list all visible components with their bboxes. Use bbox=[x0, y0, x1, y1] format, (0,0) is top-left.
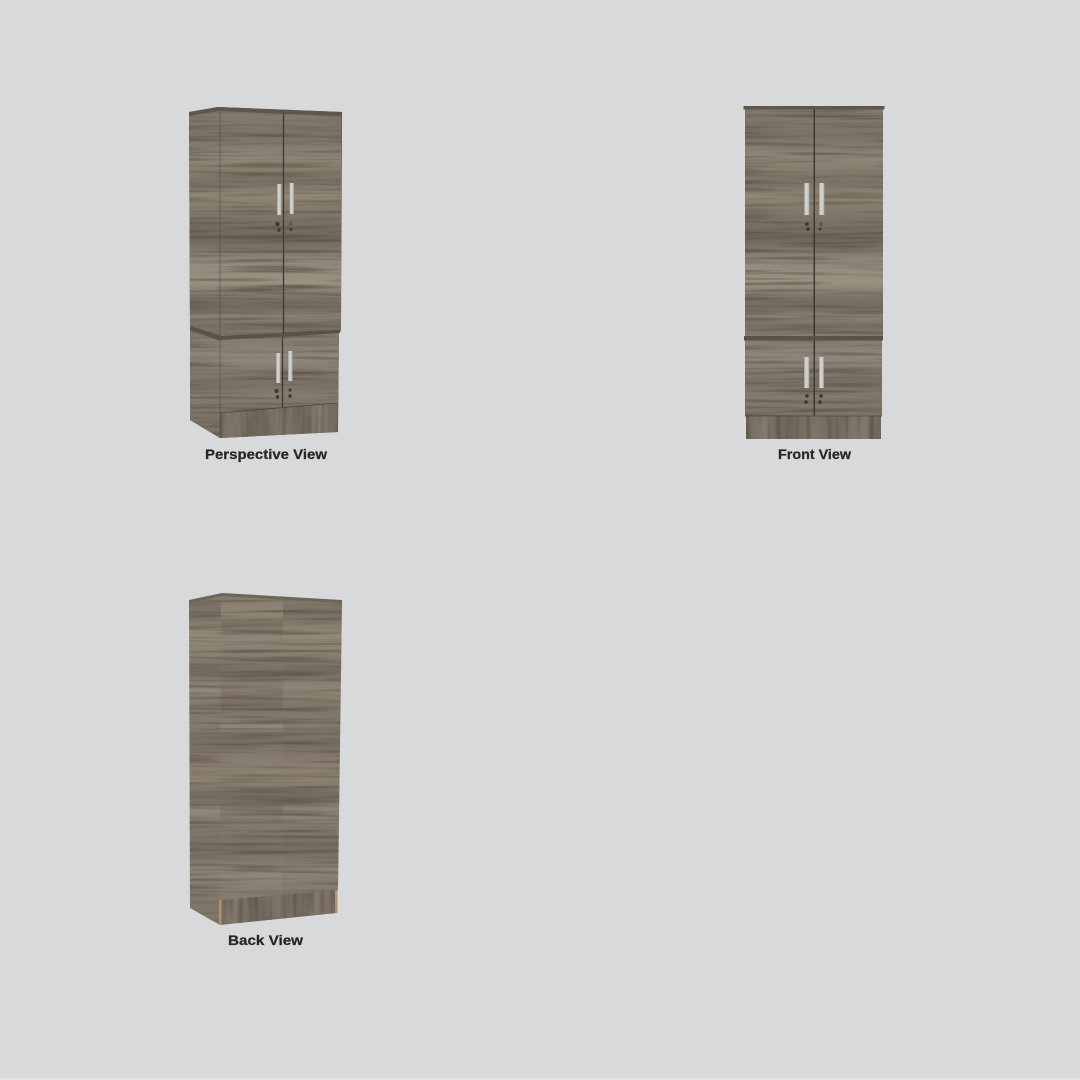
lower left door bbox=[220, 337, 282, 413]
upper left door bbox=[745, 109, 814, 336]
locks bbox=[804, 222, 823, 404]
cabinet silhouette bbox=[189, 107, 342, 438]
back panel right bbox=[283, 598, 342, 895]
top plank bbox=[744, 106, 884, 110]
back panel left bbox=[220, 596, 284, 900]
lower right door bbox=[283, 333, 339, 407]
bottom edge strip bbox=[0, 1078, 1080, 1080]
panel: front view bbox=[744, 106, 884, 462]
panel: perspective view bbox=[189, 107, 342, 462]
panel: back view bbox=[189, 593, 342, 948]
lower left door bbox=[745, 340, 814, 416]
door seams bbox=[745, 109, 882, 416]
label: perspective view: Perspective View bbox=[205, 446, 327, 462]
divider shelf bbox=[744, 336, 883, 340]
label: back view: Back View bbox=[228, 932, 303, 948]
plinth edges bbox=[219, 890, 338, 925]
plinth bbox=[746, 416, 881, 439]
plinth bbox=[220, 890, 337, 925]
top plank bbox=[189, 593, 342, 603]
upper left door bbox=[220, 111, 283, 336]
cabinet: perspective bbox=[189, 107, 342, 438]
handles bbox=[804, 183, 825, 388]
side panel bbox=[189, 110, 220, 438]
lower right door bbox=[815, 340, 882, 416]
side panel bbox=[189, 596, 222, 925]
upper right door bbox=[815, 109, 883, 336]
cabinet: back bbox=[189, 593, 342, 925]
upper right door bbox=[284, 114, 341, 332]
divider shelf bbox=[190, 326, 340, 340]
door seams bbox=[220, 111, 338, 438]
top plank bbox=[189, 107, 342, 116]
label: front view: Front View bbox=[778, 446, 851, 462]
plinth bbox=[220, 403, 338, 438]
cabinet: front bbox=[744, 106, 884, 439]
locks bbox=[274, 222, 292, 399]
handles bbox=[276, 183, 294, 383]
